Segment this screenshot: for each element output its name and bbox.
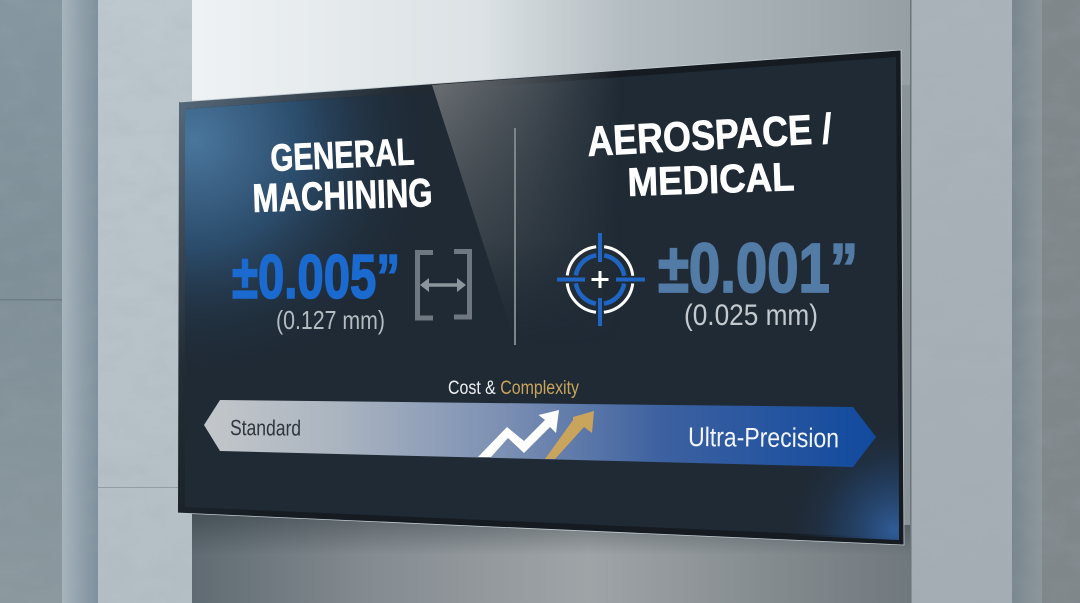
display screen xyxy=(178,50,904,545)
heading: aerospace medical: AEROSPACE / xyxy=(586,105,833,165)
heading: aerospace medical xyxy=(586,105,833,205)
heading: aerospace medical: MEDICAL xyxy=(627,155,795,205)
heading: general machining: GENERAL xyxy=(270,132,415,180)
blue glow bottom right xyxy=(760,400,899,540)
label: cost and complexity: Cost & Complexity xyxy=(448,378,579,399)
scale arrow bar xyxy=(204,400,876,467)
heading: general machining xyxy=(252,132,433,221)
divider xyxy=(514,128,516,345)
value: aerospace tolerance in mm: (0.025 mm) xyxy=(684,299,818,332)
glass glare xyxy=(432,72,602,292)
screen surface xyxy=(185,57,899,538)
icon: target crosshair xyxy=(557,233,645,326)
bezel xyxy=(178,50,904,545)
bar label: standard: Standard xyxy=(230,415,301,441)
value: general tolerance: ±0.005” xyxy=(232,243,400,312)
icon: white zigzag arrow xyxy=(478,410,559,457)
icon: gold arrow xyxy=(545,411,594,459)
value: general tolerance in mm: (0.127 mm) xyxy=(276,305,385,335)
bright edge xyxy=(178,50,904,545)
heading: general machining: MACHINING xyxy=(252,171,433,221)
blue glow top left xyxy=(185,90,560,520)
bar label: ultra-precision: Ultra-Precision xyxy=(688,422,839,453)
value: aerospace tolerance: ±0.001” xyxy=(658,229,858,307)
icon: bracket dimension xyxy=(418,252,470,318)
